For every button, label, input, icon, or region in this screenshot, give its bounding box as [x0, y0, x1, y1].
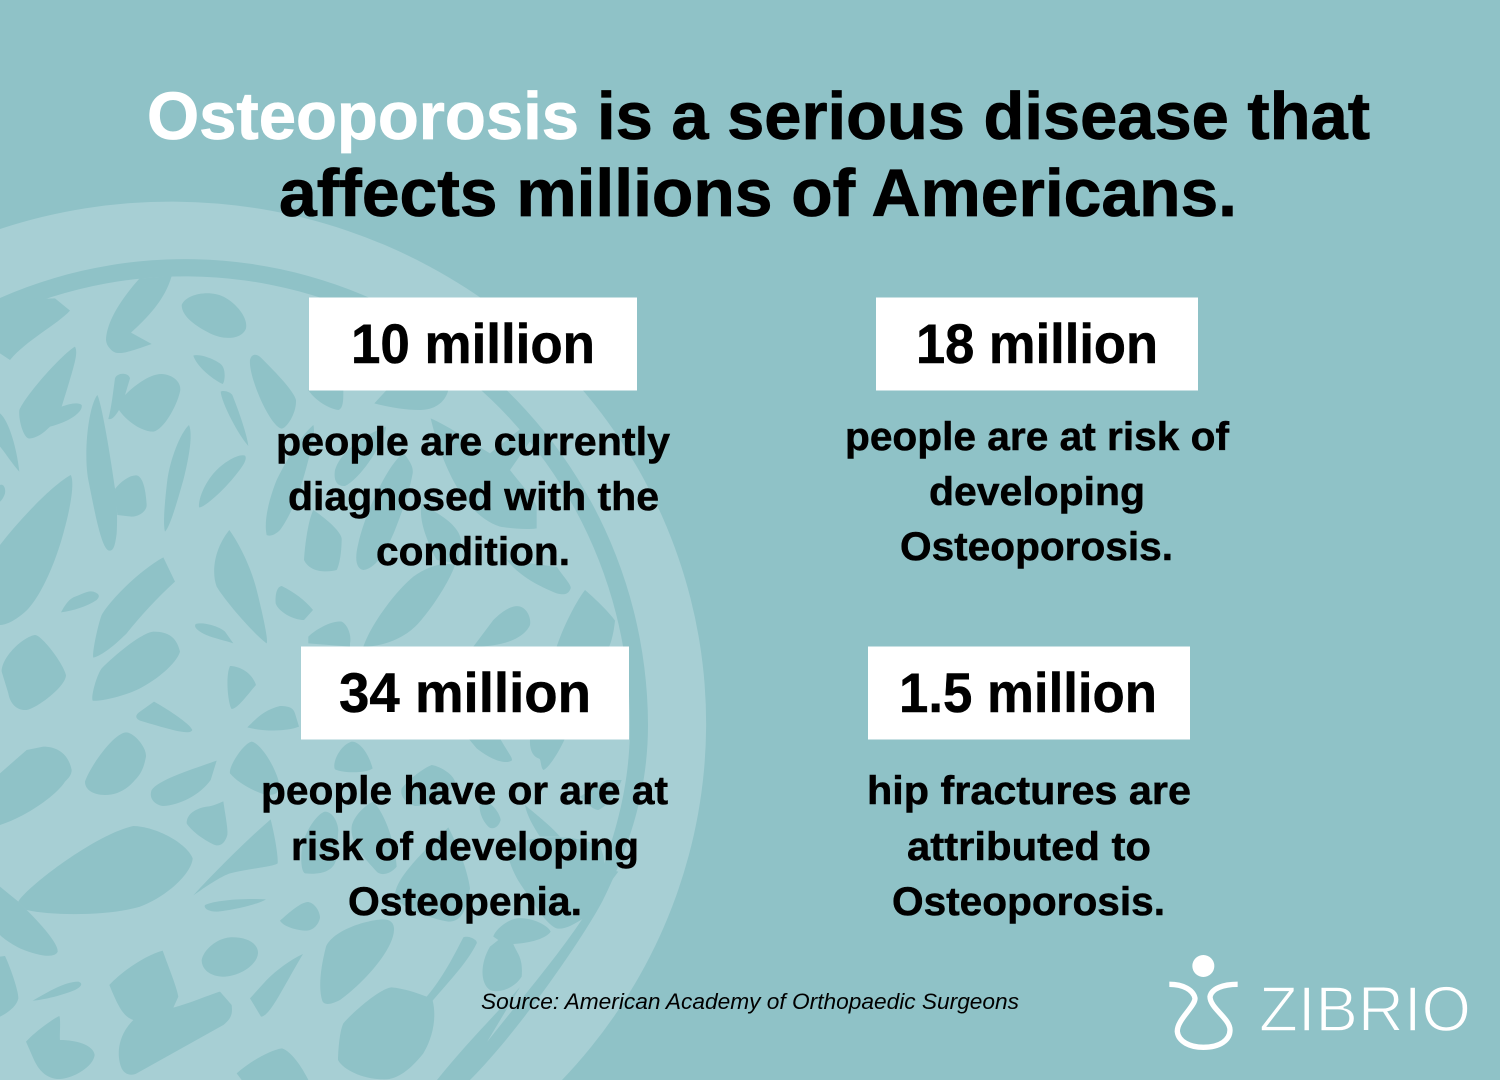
description: Osteopenia risk: Osteopenia. — [348, 880, 582, 924]
stat box: 18 million — [876, 298, 1198, 390]
title: affects millions of Americans. — [279, 156, 1237, 231]
title: is a serious disease that — [597, 79, 1370, 154]
source note: Source: American Academy of Orthopaedic Surgeons — [481, 989, 1019, 1014]
title: Osteoporosis — [147, 79, 579, 154]
description: currently diagnosed: diagnosed with the — [288, 475, 659, 519]
description: currently diagnosed — [276, 420, 671, 574]
description: at risk of Osteoporosis: people are at risk of — [845, 415, 1230, 459]
description: Osteopenia risk: risk of developing — [291, 825, 639, 869]
description: at risk of Osteoporosis: developing — [929, 470, 1145, 514]
description: currently diagnosed: condition. — [376, 530, 570, 574]
stat box: 1.5 million — [868, 646, 1190, 740]
description: Osteopenia risk: people have or are at — [261, 769, 668, 813]
description: currently diagnosed: people are currently — [276, 420, 671, 464]
wordmark: ZIBRIO — [1259, 973, 1471, 1045]
stat box: 34 million: 34 million — [339, 661, 591, 724]
description: at risk of Osteoporosis — [845, 415, 1230, 569]
description: hip fractures — [867, 769, 1191, 924]
panel: 18 million at risk — [845, 298, 1230, 569]
panel: 1.5 million hip fractures — [867, 646, 1191, 924]
background graphic: bone cross-section — [0, 202, 706, 1080]
panel: 10 million diagnosed — [276, 298, 671, 574]
panel: 34 million Osteopenia — [261, 646, 668, 924]
description: hip fractures: hip fractures are — [867, 769, 1191, 813]
icon: figure — [1169, 955, 1238, 1047]
description: hip fractures: attributed to — [907, 825, 1151, 869]
title — [147, 79, 1370, 231]
stat box: 34 million — [301, 646, 629, 740]
stat box: 1.5 million: 1.5 million — [899, 661, 1157, 724]
stat box: 18 million: 18 million — [916, 312, 1158, 375]
logo: Zibrio — [1169, 955, 1471, 1047]
description: hip fractures: Osteoporosis. — [892, 880, 1165, 924]
stat box: 10 million: 10 million — [351, 312, 595, 375]
stat box: 10 million — [309, 298, 637, 390]
description: at risk of Osteoporosis: Osteoporosis. — [900, 525, 1173, 569]
description: Osteopenia risk — [261, 769, 668, 924]
